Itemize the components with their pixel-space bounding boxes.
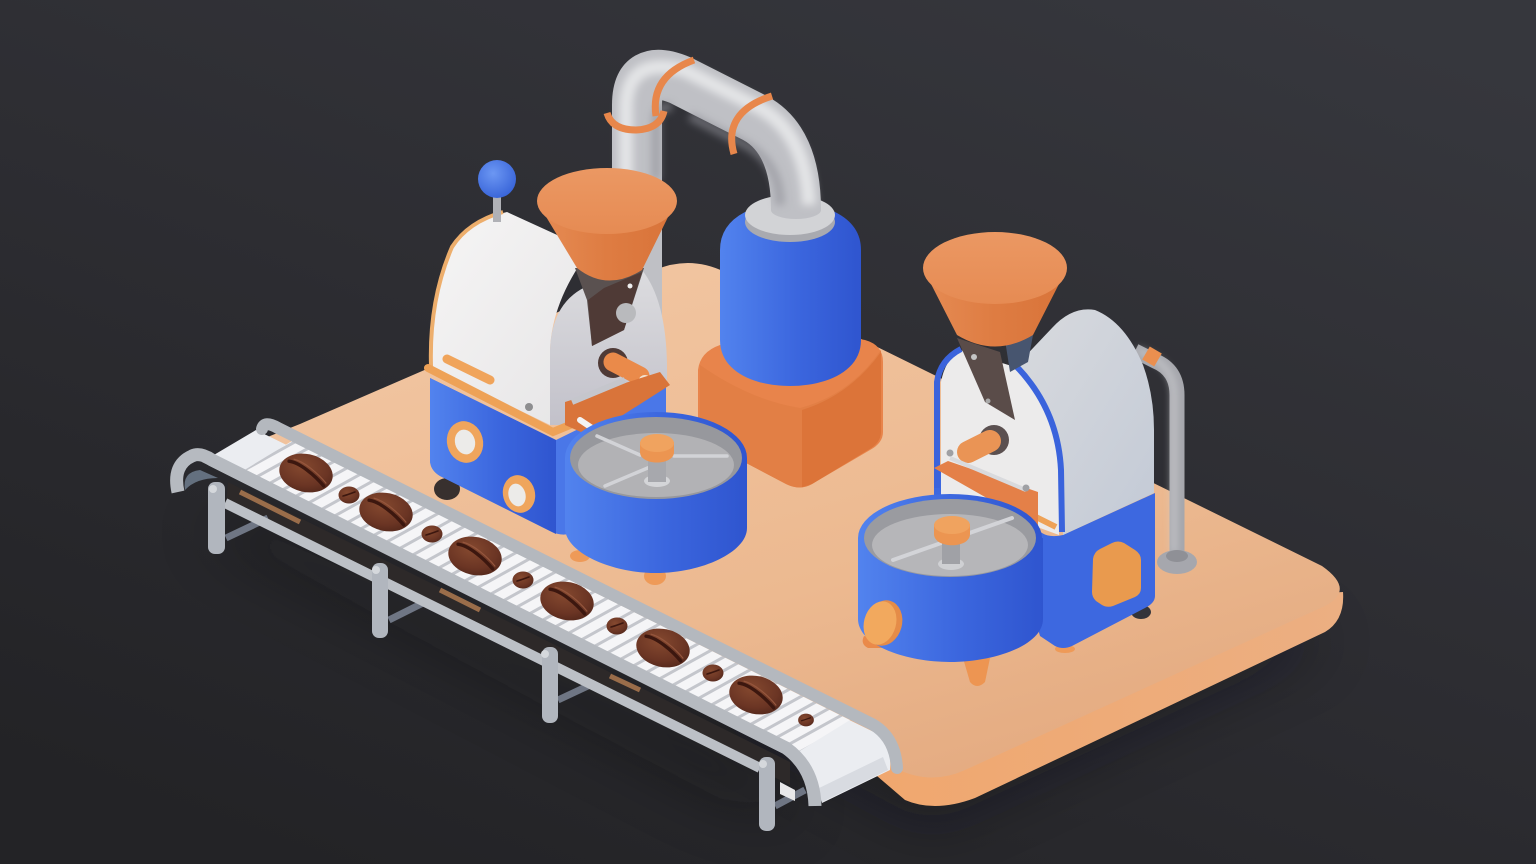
chute xyxy=(934,450,1038,532)
front knob xyxy=(859,596,907,650)
right roaster xyxy=(858,232,1197,686)
bowl xyxy=(858,494,1043,686)
left roaster xyxy=(428,160,747,585)
housing orange outline xyxy=(431,212,503,366)
housing white front xyxy=(941,350,1059,535)
understructure xyxy=(225,482,805,806)
platform top xyxy=(260,263,1340,778)
platform side xyxy=(870,592,1343,806)
hopper collar xyxy=(1005,335,1033,372)
orange trim xyxy=(428,368,582,432)
wheel xyxy=(434,478,460,500)
bowl xyxy=(565,412,747,585)
lower rail xyxy=(177,455,815,806)
side pipe xyxy=(1135,350,1197,574)
knob: upper panel dial xyxy=(442,417,488,467)
chute xyxy=(565,372,670,436)
housing white side xyxy=(430,212,590,425)
base box xyxy=(430,378,666,535)
beans xyxy=(276,449,814,726)
agitator arm xyxy=(893,518,1012,560)
orange base block xyxy=(698,325,883,488)
platform shadow xyxy=(700,600,1330,825)
central tower with overhead pipe xyxy=(607,60,883,488)
housing grey front xyxy=(550,270,667,425)
bowl foot xyxy=(644,567,666,585)
belt xyxy=(202,430,890,803)
hopper xyxy=(537,168,677,281)
hopper xyxy=(923,232,1067,346)
lever ball xyxy=(478,160,516,222)
orange square control xyxy=(1092,542,1141,607)
hopper bracket xyxy=(575,268,644,346)
agitator stem and cap xyxy=(640,434,674,487)
orange trim xyxy=(1030,514,1056,527)
rivet xyxy=(525,403,533,411)
back foot xyxy=(570,550,590,562)
conveyor xyxy=(177,424,897,831)
pipe xyxy=(626,67,821,370)
legs xyxy=(208,482,775,831)
housing blue outline xyxy=(937,349,1062,532)
agitator arms xyxy=(597,436,727,486)
knob: lower panel dial xyxy=(499,472,539,516)
base box xyxy=(1000,493,1155,648)
housing grey side xyxy=(1015,309,1154,535)
axle and handle xyxy=(598,348,651,385)
agitator stem and cap xyxy=(934,516,970,570)
bowl legs xyxy=(963,658,990,686)
blue lower strip xyxy=(934,470,964,510)
upper rail xyxy=(262,424,897,768)
pipe clamps xyxy=(607,60,772,154)
conveyor shadow xyxy=(200,520,800,820)
pipe collar xyxy=(745,195,835,242)
base foot xyxy=(1055,645,1075,653)
platform xyxy=(260,263,1343,825)
slot handle xyxy=(447,359,490,380)
hopper bracket xyxy=(957,338,1015,420)
blue cylinder xyxy=(720,212,861,386)
wheel xyxy=(1131,605,1151,619)
axle and handle xyxy=(968,425,1009,455)
